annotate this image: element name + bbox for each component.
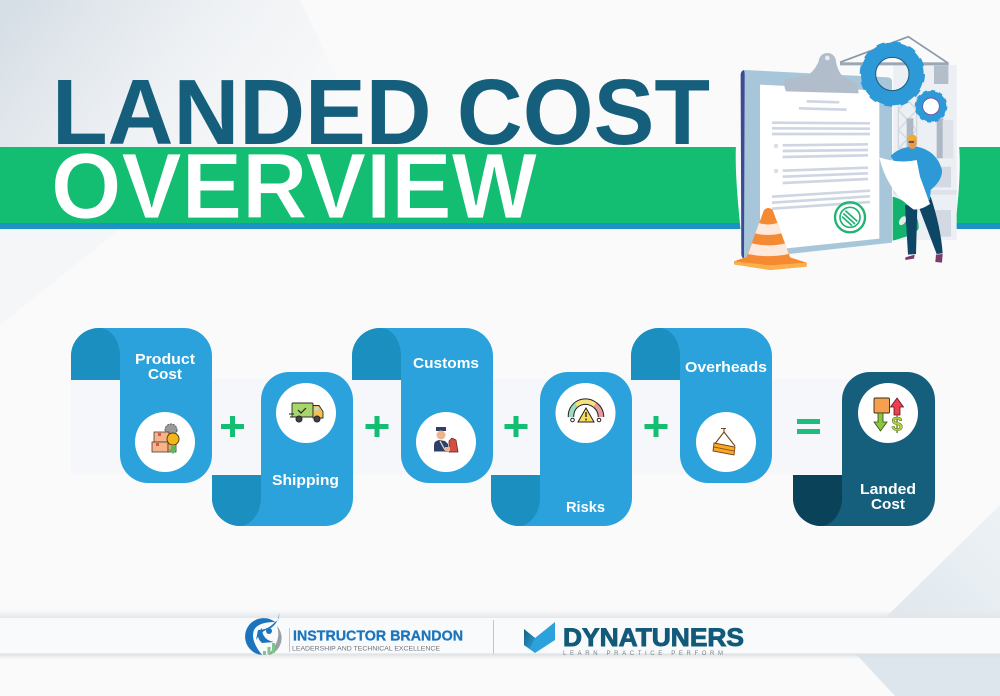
panel: Customs bbox=[352, 328, 493, 483]
panel: Customs: Customs bbox=[413, 355, 479, 372]
panel: Shipping: Shipping bbox=[272, 472, 339, 489]
title bbox=[51, 60, 710, 238]
panel: Product Cost: Product bbox=[135, 351, 195, 368]
icon: box and price arrows bbox=[874, 398, 904, 436]
green title band bbox=[0, 147, 1000, 229]
panel: Overheads: Overheads bbox=[685, 359, 767, 376]
logo mark bbox=[245, 613, 282, 655]
illustration: clipboard and engineer bbox=[734, 37, 960, 270]
panel: Product Cost bbox=[71, 328, 212, 483]
halo behind illustration bbox=[736, 145, 960, 231]
panel: Product Cost: Cost bbox=[148, 366, 182, 383]
clipboard board bbox=[741, 70, 892, 259]
panel: Risks: Risks bbox=[566, 499, 605, 516]
logo: Dynatuners: DYNATUNERS bbox=[563, 624, 744, 652]
traffic cone bbox=[734, 208, 807, 270]
operator: plus 1 bbox=[221, 416, 244, 437]
panel: Risks bbox=[491, 372, 632, 526]
panel: Landed Cost: Cost bbox=[871, 496, 905, 513]
clipboard paper bbox=[760, 85, 879, 249]
green shrub bbox=[893, 197, 919, 241]
building with crane roof bbox=[840, 37, 957, 240]
panel: Landed Cost: Landed bbox=[860, 481, 916, 498]
icon: delivery truck bbox=[289, 403, 323, 422]
clipboard text lines bbox=[772, 101, 870, 209]
panel: Overheads bbox=[631, 328, 772, 483]
green stamp bbox=[835, 202, 865, 232]
logo: Dynatuners: LEARN PRACTICE PERFORM bbox=[563, 651, 723, 657]
logo mark bbox=[524, 622, 555, 653]
logo: Dynatuners bbox=[524, 622, 744, 657]
engineer figure bbox=[879, 135, 943, 263]
operator: plus 3 bbox=[504, 416, 528, 437]
footer band bbox=[0, 610, 1000, 660]
operator: plus 4 bbox=[644, 416, 668, 437]
icon: suspended crate bbox=[713, 428, 735, 455]
logo: Instructor Brandon bbox=[245, 613, 463, 655]
clipboard clip bbox=[784, 53, 859, 93]
icon: risk gauge bbox=[571, 402, 601, 422]
icon: box and price arrows: $ bbox=[891, 414, 903, 436]
logo: Instructor Brandon: LEADERSHIP AND TECHNICAL EXCELLENCE bbox=[292, 646, 441, 652]
large gear bbox=[863, 45, 922, 103]
icon: boxes and coin bbox=[152, 424, 179, 454]
operator: equals bbox=[797, 419, 820, 434]
title: LANDED COST bbox=[52, 60, 710, 164]
logo: Instructor Brandon: INSTRUCTOR BRANDON bbox=[293, 628, 463, 644]
small gear bbox=[916, 92, 946, 121]
panel: Shipping bbox=[212, 372, 353, 526]
title: OVERVIEW bbox=[51, 134, 537, 238]
panel: Landed Cost bbox=[793, 372, 935, 526]
icon: customs officer bbox=[434, 427, 458, 452]
connector strip bbox=[71, 379, 851, 474]
operator: plus 2 bbox=[366, 416, 388, 437]
